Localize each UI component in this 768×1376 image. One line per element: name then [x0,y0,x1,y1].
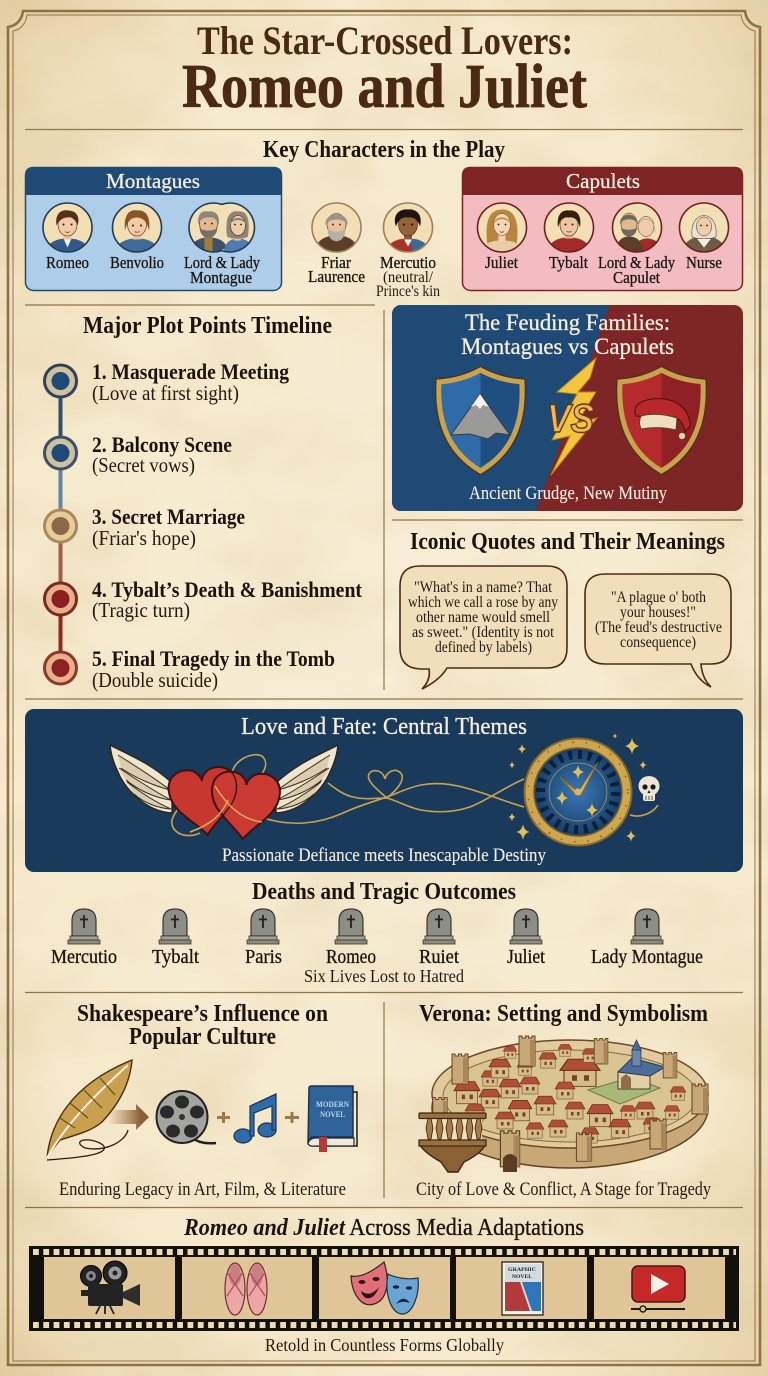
icon: clock of fate [524,738,632,846]
callout: what's in a name: as sweet." (Identity is not [412,624,554,641]
sparkles [508,733,647,842]
timeline text [92,359,363,692]
labels: Capulet characters: Juliet [485,253,518,272]
heading: timeline: Major Plot Points Timeline [83,313,332,339]
panel: Montagues [25,167,282,290]
icon: modern novel: MODERN [316,1099,350,1109]
map: Verona illustration [419,1036,708,1172]
right wing [276,745,338,813]
plus sign [285,1112,299,1123]
icon: winged hearts [110,745,338,841]
portrait: Benvolio [112,203,162,252]
portrait: Tybalt [544,203,594,252]
icon: quill [47,1060,132,1160]
towers [433,1036,708,1167]
icon: film reel [156,1091,216,1143]
panel: the feuding families [392,305,743,511]
labels: neutral characters: Friar [321,253,351,272]
left wing [110,745,172,813]
caption: passionate defiance: Passionate Defiance meets Inescapable Destiny [222,845,546,866]
caption: retold: Retold in Countless Forms Globally [265,1335,504,1355]
panel: love and fate [25,709,743,872]
node 3 [44,510,76,542]
timeline text: (Friar's hope) [92,526,196,550]
icon: Montague shield [439,370,522,471]
callout: what's in a name: "What's in a name? That [414,579,552,596]
labels: Montague characters: Montague [190,268,252,287]
tombstone labels: Lady Montague [591,947,703,968]
callout: a plague: your houses!" [620,604,696,621]
timeline text: 5. Final Tragedy in the Tomb [92,646,335,671]
timeline text: 3. Secret Marriage [92,504,245,529]
callout: what's in a name [400,566,567,689]
callout: a plague: consequence) [620,634,696,651]
callout: a plague [585,574,731,687]
icon: film camera [80,1261,140,1314]
timeline text: (Tragic turn) [92,598,190,622]
panel: influence icons [47,1060,357,1160]
sprocket holes [33,1252,736,1325]
labels: Montague characters: Lord & Lady [184,253,260,272]
labels: Capulet characters: Nurse [686,253,722,272]
icon: modern novel: NOVEL [320,1109,345,1119]
caption: ancient grudge: Ancient Grudge, New Mutiny [469,484,668,504]
icon: theatre masks [351,1262,418,1314]
neutral characters [308,203,440,300]
film strip [29,1246,739,1331]
icon: graphic novel: GRAPHIC [508,1267,536,1273]
city walls [432,1040,708,1168]
portrait: Friar Laurence [312,203,361,252]
node 1 [44,365,76,397]
deaths row: tombstones [51,909,703,986]
callout: what's in a name: other name would smell [416,609,550,626]
VS label: VS [547,397,594,441]
icon: graphic novel: NOVEL [512,1274,532,1280]
timeline text: 1. Masquerade Meeting [92,359,289,384]
tombstone labels: Paris [245,947,282,968]
callout: what's in a name: which we call a rose by any [408,594,558,611]
heading: feuding families [461,310,674,359]
city gate [503,1154,517,1172]
labels: Capulet characters: Capulet [613,268,660,287]
portrait: Romeo [43,203,92,252]
balcony [419,1113,486,1172]
labels: neutral characters: Mercutio [380,253,436,272]
heading: feuding families: Montagues vs Capulets [461,334,674,359]
heading: love and fate: Love and Fate: Central Themes [241,714,527,740]
icon: skull [638,776,660,801]
portrait: Mercutio [384,203,432,252]
tombstone labels: Juliet [507,947,546,968]
labels: Montague characters: Romeo [46,253,89,272]
heading: key characters: Key Characters in the Play [263,137,505,163]
portrait: Lord and Lady Capulet [612,203,662,252]
labels: neutral characters: Laurence [308,267,365,286]
tombstone labels: Tybalt [152,947,200,968]
timeline connectors [58,397,62,652]
portrait: Lord and Lady Montague [189,203,254,252]
heading: Shakespeare's influence [77,1001,328,1050]
title [182,18,587,121]
icon: graphic novel [502,1262,543,1315]
timeline text: 4. Tybalt’s Death & Banishment [92,577,363,602]
portrait: Juliet [478,203,526,252]
icon: music note [234,1094,276,1143]
icon: ballet shoes [225,1263,267,1315]
labels: Capulet characters: Lord & Lady [598,253,675,272]
title: Romeo and Juliet [182,53,587,121]
heading: Shakespeare's influence: Popular Culture [129,1024,276,1050]
caption: six lives: Six Lives Lost to Hatred [304,966,464,986]
icon: lightning bolt [551,358,597,475]
timeline text: (Secret vows) [92,453,195,477]
heading: Verona: Verona: Setting and Symbolism [419,1001,708,1027]
labels: Capulet characters: Tybalt [549,253,588,272]
caption: enduring legacy: Enduring Legacy in Art, Film, & Literature [59,1179,346,1200]
church [618,1040,665,1089]
timeline text: (Double suicide) [92,668,218,692]
heading: feuding families: The Feuding Families: [465,310,670,335]
tombstone labels [51,947,703,968]
heading: Shakespeare's influence: Shakespeare’s Influence on [77,1001,328,1027]
icon: Capulet shield [620,370,703,471]
timeline text: (Love at first sight) [92,381,239,405]
heading: iconic quotes: Iconic Quotes and Their Meanings [410,529,725,555]
labels: neutral characters [308,253,440,300]
timeline text: 2. Balcony Scene [92,432,232,457]
panel: Capulets [462,167,743,290]
labels: Montague characters [46,253,260,287]
tombstone labels: Mercutio [51,947,117,968]
callout: a plague: "A plague o' both [611,589,706,606]
tombstone labels: Ruiet [419,947,460,968]
arrow: quill to media [108,1104,149,1130]
labels: Montague characters: Benvolio [110,253,164,272]
icon: modern novel [308,1086,357,1152]
node 5 [44,652,76,684]
icon: video player [631,1266,685,1312]
node 4 [44,583,76,615]
labels: neutral characters: Prince's kin [376,283,440,300]
plus sign [217,1112,230,1123]
panel: Montagues: Montagues [106,169,200,193]
tombstone labels: Romeo [326,947,376,968]
title: The Star-Crossed Lovers: [197,18,573,63]
timeline: plot points [44,359,363,692]
panel: Capulets: Capulets [566,169,640,193]
callout: what's in a name: defined by labels) [435,639,532,656]
golden threads [172,755,658,836]
icon: tombstones [68,909,663,944]
houses [454,1044,686,1143]
heading: media adaptations: Romeo and Juliet Across Media Adaptations [183,1215,584,1241]
node 2 [44,437,76,469]
labels: neutral characters: (neutral/ [383,269,434,286]
callout: a plague: (The feud's destructive [595,619,722,636]
caption: city of love: City of Love & Conflict, A Stage for Tragedy [416,1179,711,1200]
heading: deaths: Deaths and Tragic Outcomes [252,879,516,905]
portrait: Nurse [680,203,728,252]
film frames [44,1257,725,1319]
labels: Capulet characters [485,253,722,287]
